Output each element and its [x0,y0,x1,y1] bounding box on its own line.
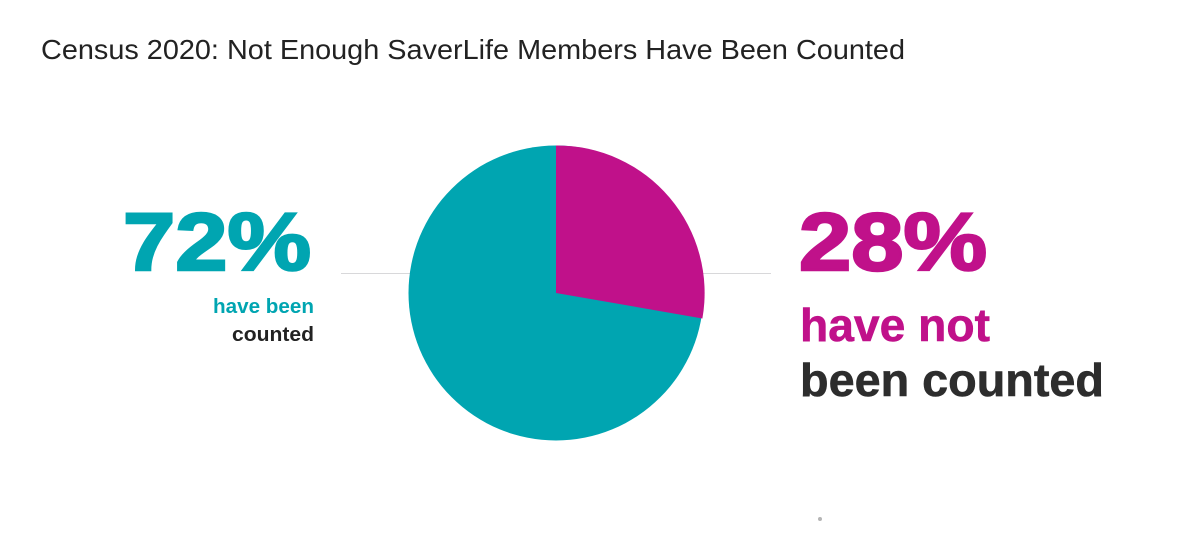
pie slice: 28% not counted [556,145,705,318]
right stat: 28% have not been counted [799,197,1104,406]
leader line: right [700,272,771,274]
title: Census 2020: Not Enough SaverLife Members Have Been Counted [41,34,905,65]
leader line: left [341,272,412,274]
label: have not: have not [800,299,990,351]
label: have been: have been [213,296,314,318]
left stat: 72% have been counted [123,197,314,346]
small grey dot [818,517,822,521]
percentage: 28%: 28% [799,197,987,288]
pie slice: 72% counted [408,146,704,440]
percentage: 72%: 72% [123,197,311,288]
label: counted: counted [232,324,314,346]
label: been counted: been counted [800,354,1104,406]
pie chart [408,145,705,441]
